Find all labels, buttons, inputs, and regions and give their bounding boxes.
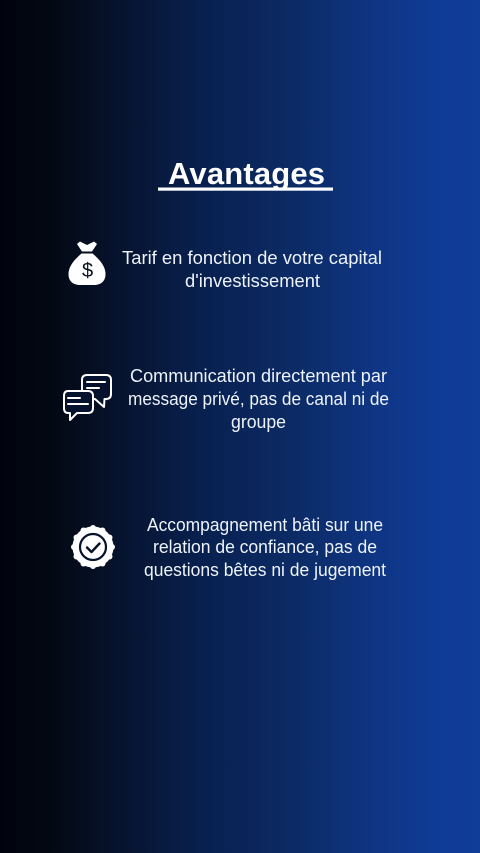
panel: benefit 2 xyxy=(64,366,389,432)
text: communication xyxy=(128,366,389,432)
icon: check badge xyxy=(71,525,115,569)
icon: money bag: $ xyxy=(82,260,93,282)
text: communication: message privé, pas de canal ni de xyxy=(128,389,389,409)
text: accompagnement: Accompagnement bâti sur une xyxy=(147,515,383,535)
text: accompagnement: questions bêtes ni de jugement xyxy=(144,560,386,580)
text: communication: groupe xyxy=(231,412,286,432)
icon: money bag xyxy=(68,242,106,285)
text: communication: Communication directement par xyxy=(130,366,387,386)
title: Avantages: Avantages xyxy=(168,156,325,191)
panel: benefit 3 xyxy=(71,515,386,580)
text: tarif: Tarif en fonction de votre capital xyxy=(122,248,382,268)
text: accompagnement: relation de confiance, pas de xyxy=(153,537,377,557)
icon: chat bubbles xyxy=(64,375,111,420)
panel: benefit 1 xyxy=(68,242,382,291)
text: accompagnement xyxy=(144,515,386,580)
text: tarif xyxy=(122,248,382,291)
text: tarif: d'investissement xyxy=(185,271,320,291)
